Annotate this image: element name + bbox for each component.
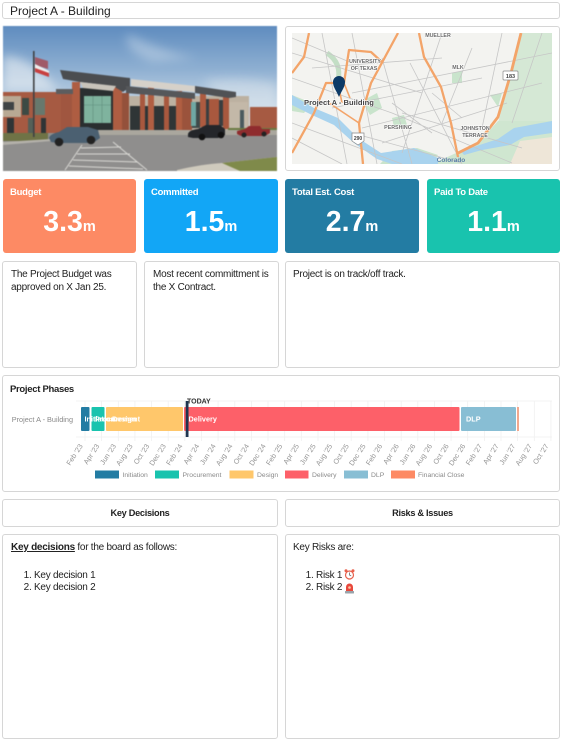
gantt chart: Feb '23 — [64, 442, 85, 467]
KPI: paid to date: 1.1m — [467, 206, 520, 238]
gantt chart: Initiation — [84, 414, 115, 424]
panel: key decisions — [2, 534, 278, 739]
KPI: paid to date: Paid To Date — [434, 187, 488, 198]
gantt chart: Feb '24 — [164, 442, 184, 467]
gantt chart: Oct '23 — [131, 442, 151, 466]
map: Colorado — [437, 157, 465, 164]
legend: DLP — [371, 472, 385, 479]
gantt chart: Delivery — [188, 414, 218, 424]
gantt chart: Dec '24 — [247, 442, 268, 467]
icon: siren — [345, 584, 354, 594]
bar: delivery — [184, 407, 460, 431]
legend — [95, 470, 465, 479]
panel: map — [285, 26, 560, 171]
gantt chart: DLP — [466, 414, 481, 424]
gantt chart: Project A - Building — [12, 415, 73, 424]
gantt chart: Dec '26 — [447, 442, 467, 467]
title: Project A - Building — [10, 4, 111, 18]
map pin — [333, 76, 345, 97]
KPI: paid to date — [427, 179, 560, 253]
KPI: committed: Committed — [151, 187, 198, 198]
bar: design — [106, 407, 183, 431]
crosswalk — [65, 142, 147, 170]
KPI: budget: 3.3m — [43, 206, 96, 238]
KPI: total estimated cost: Total Est. Cost — [292, 187, 354, 198]
gantt chart: Feb '25 — [264, 442, 284, 467]
map: UNIVERSITY — [349, 59, 381, 65]
KPI: budget — [3, 179, 136, 253]
gantt chart: Oct '26 — [431, 442, 451, 466]
ground strips — [98, 130, 277, 135]
map: OF TEXAS — [351, 66, 378, 72]
gantt chart — [12, 398, 552, 479]
gantt chart: Aug '26 — [413, 442, 434, 467]
KPI: budget: Budget — [10, 187, 41, 198]
legend: Procurement — [182, 472, 222, 479]
map: PERSHING — [384, 125, 412, 131]
bar: financial close — [517, 407, 519, 431]
heading: risks and issues — [285, 499, 560, 527]
map: Project A - Building — [304, 98, 374, 107]
bar: DLP — [461, 407, 516, 431]
legend: Design — [257, 472, 278, 479]
panel: risks: Key Risks are: — [293, 542, 354, 553]
gantt chart: Feb '26 — [364, 442, 384, 467]
gantt chart: Apr '27 — [481, 442, 501, 466]
gantt chart: Aug '25 — [314, 442, 334, 467]
text: status note: Project is on track/off track. — [293, 269, 406, 280]
panel: risks: Risk 2 — [316, 582, 342, 593]
gantt chart: Jun '23 — [98, 442, 118, 466]
text: budget note — [2, 261, 137, 368]
gantt chart: Procurement — [95, 414, 141, 424]
panel: key decisions: Key decisions for the board as follows: — [11, 542, 177, 553]
title — [2, 2, 560, 19]
gantt chart: Feb '27 — [464, 442, 484, 467]
gantt chart: Apr '26 — [381, 442, 401, 466]
gantt chart: Aug '24 — [214, 442, 234, 467]
gantt chart: Aug '27 — [513, 442, 534, 467]
map: 183 — [506, 74, 515, 80]
flag — [33, 51, 35, 137]
KPI: total estimated cost: 2.7m — [326, 206, 378, 238]
KPI: committed: 1.5m — [185, 206, 237, 238]
legend: Financial Close — [418, 472, 465, 479]
gantt chart: Oct '24 — [231, 442, 251, 466]
roofs — [60, 70, 130, 92]
heading: key decisions — [2, 499, 278, 527]
heading: key decisions: Key Decisions — [111, 508, 169, 518]
map — [292, 33, 552, 164]
gantt chart: Dec '25 — [347, 442, 368, 467]
heading: risks and issues: Risks & Issues — [392, 508, 453, 518]
today marker — [186, 398, 211, 437]
photo: school building — [2, 25, 278, 172]
map: MUELLER — [425, 33, 451, 39]
panel: key decisions: Key decision 1 — [34, 570, 95, 581]
panel: risks — [285, 534, 560, 739]
panel: key decisions: Key decision 2 — [34, 582, 95, 593]
map: TERRACE — [462, 133, 488, 139]
gantt chart: Aug '23 — [114, 442, 135, 467]
central facade — [129, 96, 249, 132]
heading: project phases: Project Phases — [10, 384, 74, 395]
text: commitment note — [144, 261, 279, 368]
gantt chart: Apr '25 — [281, 442, 301, 466]
panel: project phases — [2, 375, 560, 492]
panel: risks: Risk 1 — [316, 570, 342, 581]
KPI: committed — [144, 179, 278, 253]
gantt chart: Apr '24 — [181, 442, 201, 466]
gantt chart: Jun '27 — [497, 442, 517, 466]
bar: initiation — [81, 407, 90, 431]
gantt chart: Jun '25 — [298, 442, 318, 466]
legend: Initiation — [122, 472, 148, 479]
icon: alarm clock — [344, 569, 354, 580]
gantt chart: Dec '23 — [147, 442, 168, 467]
gantt chart: Design — [112, 414, 136, 424]
bar: procurement — [92, 407, 104, 431]
left wing — [3, 92, 61, 133]
KPI: total estimated cost — [285, 179, 419, 253]
gantt chart: Apr '23 — [81, 442, 101, 466]
text: commitment note: Most recent committment is the X Contract. — [153, 269, 268, 293]
map: MLK — [452, 65, 464, 71]
gantt chart: Jun '24 — [198, 442, 218, 466]
map: JOHNSTON — [460, 126, 490, 132]
today marker: TODAY — [187, 398, 211, 406]
text: budget note: The Project Budget was approved on X Jan 25. — [11, 269, 111, 293]
gantt chart: Oct '25 — [331, 442, 351, 466]
cars — [49, 127, 100, 143]
map: 290 — [354, 136, 362, 142]
text: status note — [285, 261, 560, 368]
legend: Delivery — [312, 472, 337, 479]
gantt chart: Jun '26 — [397, 442, 417, 466]
gantt chart: Oct '27 — [531, 442, 551, 466]
